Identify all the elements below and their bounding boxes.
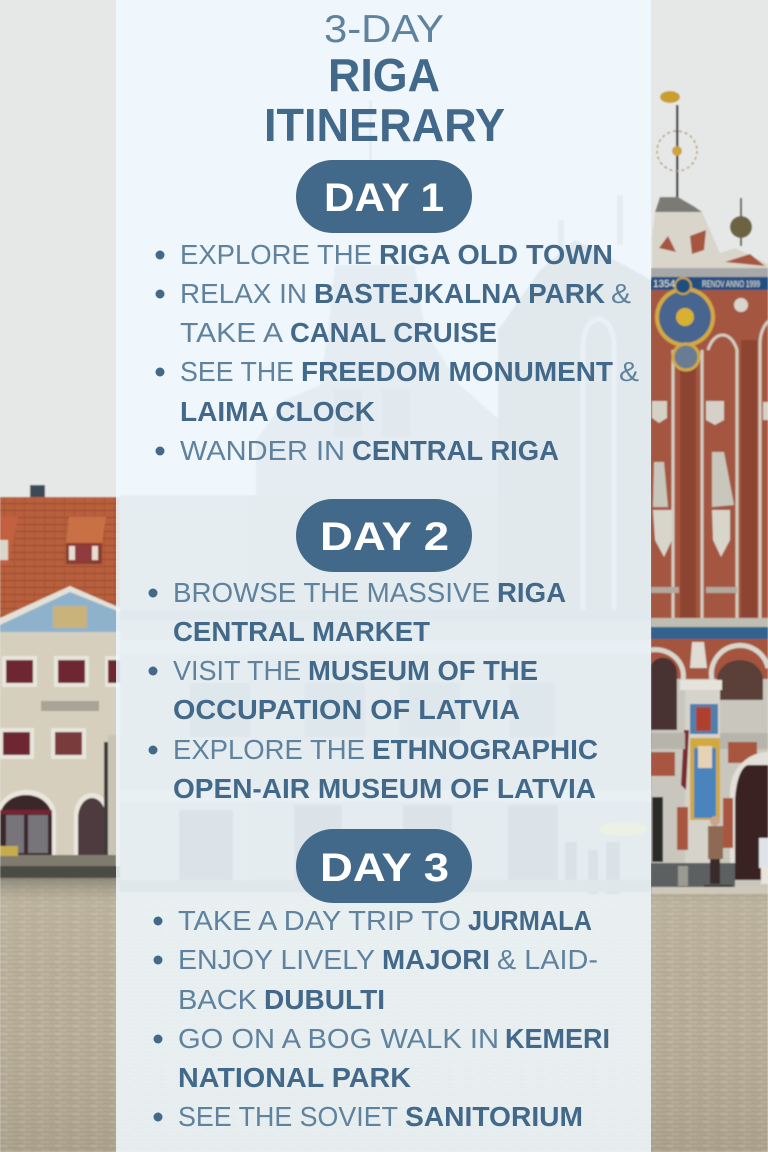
item: central riga (156, 435, 559, 466)
section: day 1 (156, 160, 639, 466)
item: bastejkalna park and canal cruise (156, 278, 631, 348)
item: freedom monument and laima clock: FREEDOM MONUMENT (301, 356, 613, 387)
item: kemeri national park: NATIONAL PARK (178, 1062, 411, 1093)
day 3 pill: DAY 3 (320, 846, 449, 890)
item: museum of the occupation (148, 655, 538, 725)
item: majori and dubulti: ENJOY LIVELY (178, 944, 375, 975)
item: bastejkalna park and canal cruise: BASTEJKALNA PARK (314, 278, 605, 309)
item: majori and dubulti (154, 944, 598, 1015)
item: majori and dubulti: BACK (178, 984, 257, 1015)
day 1 pill (296, 160, 472, 233)
item: kemeri national park: GO ON A BOG WALK IN (178, 1023, 499, 1054)
item: riga central market (148, 577, 566, 647)
item: jurmala (154, 905, 592, 936)
item: soviet sanitorium: SEE THE SOVIET (178, 1101, 398, 1132)
cobblestone square (0, 878, 768, 1152)
item: majori and dubulti: DUBULTI (264, 984, 385, 1015)
item: riga old town (156, 239, 613, 270)
item: riga central market: CENTRAL MARKET (173, 616, 430, 647)
item: ethnographic open-air museum: EXPLORE THE (173, 734, 365, 765)
item: riga old town: RIGA OLD TOWN (379, 239, 613, 270)
section: day 3 (154, 829, 610, 1132)
item: riga central market: BROWSE THE MASSIVE (173, 577, 490, 608)
item: museum of the occupation: VISIT THE (173, 655, 301, 686)
panel: translucent itinerary column (116, 0, 651, 1152)
item: museum of the occupation: MUSEUM OF THE (308, 655, 538, 686)
item: majori and dubulti: MAJORI (382, 944, 490, 975)
item: ethnographic open-air museum: OPEN-AIR MUSEUM OF LATVIA (173, 773, 596, 804)
item: jurmala: TAKE A DAY TRIP TO (178, 905, 461, 936)
item: soviet sanitorium: SANITORIUM (405, 1101, 583, 1132)
right building: House of the Blackheads (651, 91, 768, 894)
item: freedom monument and laima clock: & (619, 356, 639, 387)
item: museum of the occupation: OCCUPATION OF LATVIA (173, 694, 520, 725)
title: ITINERARY (264, 99, 505, 151)
item: bastejkalna park and canal cruise: & (611, 278, 631, 309)
item: riga central market: RIGA (497, 577, 566, 608)
item: majori and dubulti: & LAID- (497, 944, 598, 975)
item: ethnographic open-air museum: ETHNOGRAPHIC (372, 734, 598, 765)
item: central riga: CENTRAL RIGA (352, 435, 559, 466)
item: kemeri national park (154, 1023, 610, 1093)
item: freedom monument and laima clock (156, 356, 639, 427)
title: RIGA (328, 49, 440, 101)
left building (0, 485, 125, 878)
item: bastejkalna park and canal cruise: CANAL CRUISE (290, 317, 497, 348)
item: kemeri national park: KEMERI (505, 1023, 610, 1054)
item: freedom monument and laima clock: SEE THE (180, 356, 294, 387)
item: central riga: WANDER IN (180, 435, 345, 466)
section: day 2 (148, 499, 598, 804)
item: jurmala: JURMALA (468, 905, 592, 936)
item: riga old town: EXPLORE THE (180, 239, 372, 270)
title: 3-DAY (324, 8, 444, 51)
day 2 pill (296, 499, 472, 572)
central facade seen through the panel (120, 100, 651, 894)
item: soviet sanitorium (154, 1101, 583, 1132)
item: freedom monument and laima clock: LAIMA CLOCK (180, 396, 375, 427)
day 1 pill: DAY 1 (324, 176, 444, 220)
right building: House of the Blackheads: 1354 (653, 279, 676, 290)
item: bastejkalna park and canal cruise: RELAX IN (180, 278, 307, 309)
title (264, 8, 505, 151)
item: bastejkalna park and canal cruise: TAKE A (180, 317, 283, 348)
item: ethnographic open-air museum (148, 734, 598, 804)
day 2 pill: DAY 2 (320, 515, 449, 559)
day 3 pill (296, 829, 472, 903)
